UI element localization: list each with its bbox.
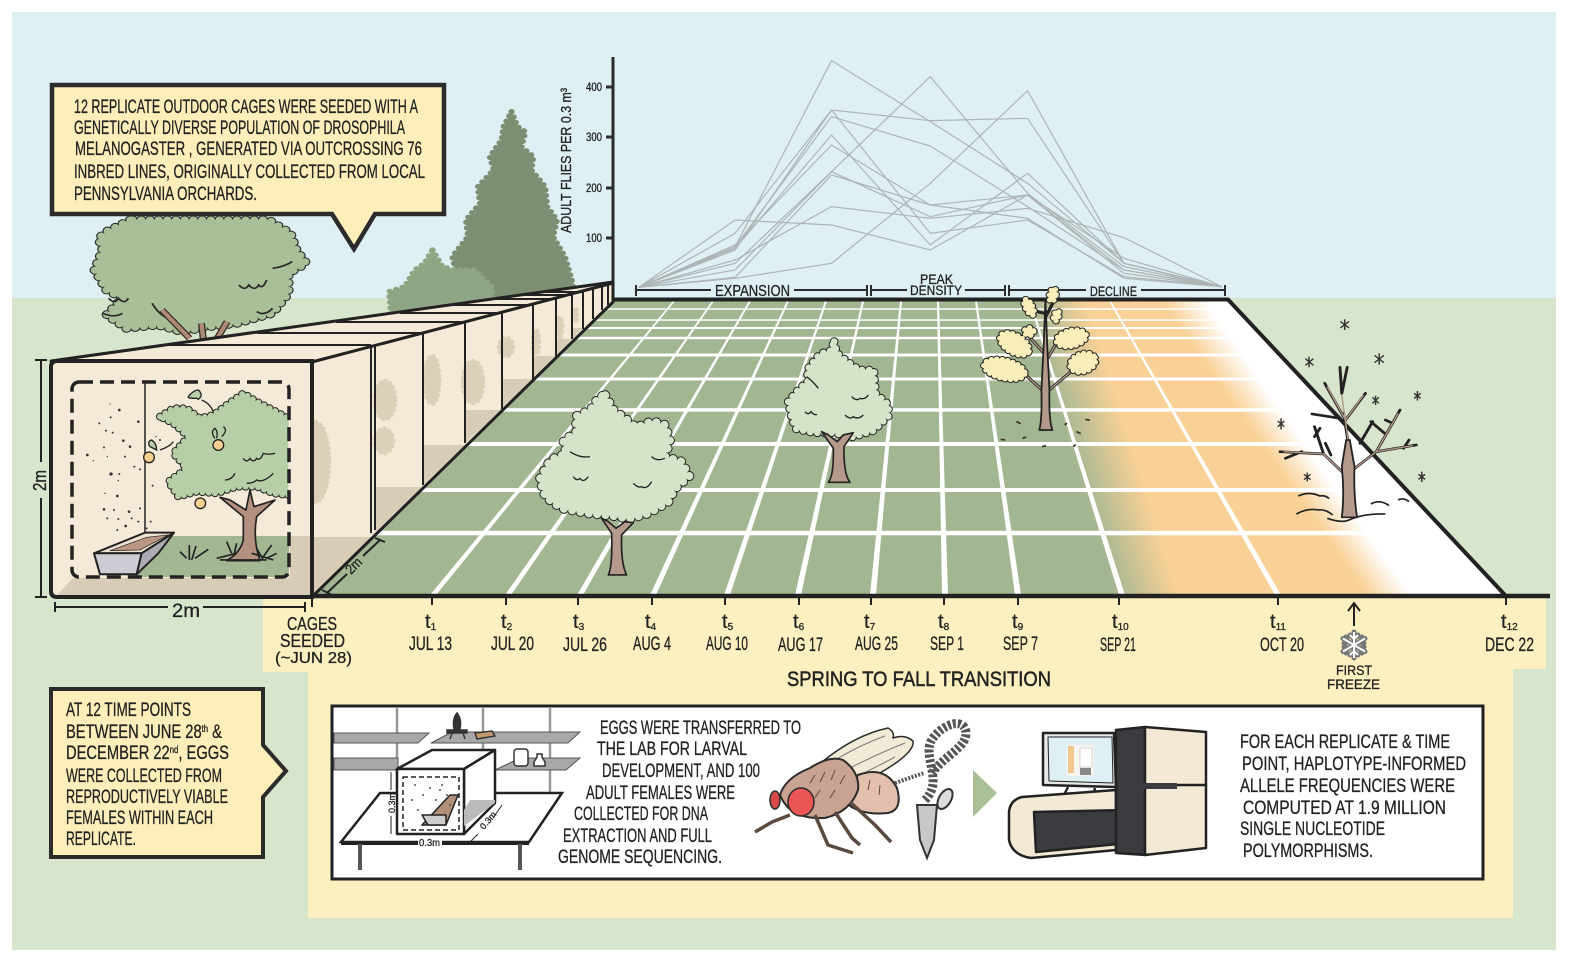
timeline labels: sampling dates: OCT 20 [1260, 635, 1304, 656]
arrow: green [973, 770, 997, 817]
callout text: DECEMBER 22 [66, 743, 200, 764]
y axis tick labels [586, 80, 602, 245]
legs [755, 802, 891, 853]
timeline labels: sampling dates: AUG 4 [633, 634, 671, 655]
icon: sample tube [917, 786, 956, 858]
tree shadows on side wall [301, 308, 577, 502]
winter branches outline [1280, 367, 1416, 473]
canopy detail [805, 377, 868, 418]
illustration: sequencer [1009, 727, 1206, 858]
callout text: GENETICALLY DIVERSE POPULATION OF DROSOPHILA [74, 118, 405, 139]
spring tree [540, 395, 689, 575]
timeline labels: sampling dates: t [722, 611, 728, 633]
canopy detail [103, 262, 292, 320]
callout text [74, 97, 425, 205]
winter trunk [1342, 440, 1357, 517]
timeline labels: sampling dates: 9 [1018, 622, 1024, 633]
phase bracket: expansion: EXPANSION [715, 283, 790, 300]
timeline yellow band [263, 596, 1546, 918]
timeline labels: sampling dates: t [501, 611, 507, 633]
small cage dimensions: 0.3m [387, 793, 397, 813]
front face panel [51, 361, 312, 597]
phase bracket: peak density: PEAK [920, 271, 954, 287]
table [341, 793, 562, 870]
timeline labels: sampling dates: t [938, 611, 944, 633]
dimension: cage width 2m [55, 601, 305, 622]
dimension: cage width 2m: 2m [172, 601, 200, 622]
timeline labels: sampling dates: SEP 7 [1003, 634, 1038, 655]
timeline labels: sampling dates: 7 [870, 622, 876, 633]
timeline labels: sampling dates [409, 611, 1534, 656]
chart series [639, 61, 1222, 287]
trunk [220, 490, 275, 561]
timeline labels: sampling dates: t [1270, 611, 1276, 633]
food trough [94, 533, 174, 574]
callout box with pointer [51, 689, 286, 857]
timeline label: cages seeded: SEEDED [280, 631, 345, 651]
timeline labels: sampling dates: SEP 1 [930, 634, 964, 655]
timeline labels: sampling dates: t [864, 611, 870, 633]
snowflakes falling [1278, 319, 1425, 482]
callout text [66, 700, 229, 850]
text: eggs transferred: DEVELOPMENT, AND 100 [602, 761, 760, 782]
y axis tick labels: 200 [586, 181, 602, 195]
dimension: cage depth 2m: 2m [342, 554, 365, 577]
trunk [822, 432, 853, 482]
canopy fill [95, 220, 306, 332]
cage row [51, 282, 613, 597]
text: allele frequencies: ALLELE FREQUENCIES WERE [1240, 776, 1455, 797]
callout text: REPRODUCTIVELY VIABLE [66, 787, 228, 808]
back corner line [144, 382, 146, 536]
flies dots [86, 403, 161, 531]
fallen leaves [1001, 419, 1090, 447]
small cage [397, 750, 495, 834]
oranges [213, 440, 224, 450]
phase bracket: decline [1009, 283, 1225, 299]
timeline labels: sampling dates: AUG 17 [778, 635, 823, 656]
timeline labels: sampling dates: SEP 21 [1100, 635, 1136, 656]
timeline label: cages seeded: CAGES [287, 614, 337, 634]
text: allele frequencies: POLYMORPHISMS. [1243, 841, 1373, 862]
phase bracket: peak density: DENSITY [910, 282, 963, 298]
floor shadows in side cages [312, 328, 583, 597]
front cage face [51, 361, 312, 597]
autumn branches [1024, 303, 1076, 390]
timeline labels: sampling dates: 1 [431, 622, 437, 633]
handle [1143, 783, 1177, 789]
leaf sprigs [149, 390, 225, 450]
microscope [447, 713, 467, 739]
timeline labels: sampling dates: t [1501, 611, 1507, 633]
text: allele frequencies: POINT, HAPLOTYPE-INFORMED [1242, 754, 1466, 775]
y axis tick labels: 400 [586, 80, 602, 94]
instrument drawer [1034, 810, 1128, 852]
text: eggs transferred: THE LAB FOR LARVAL [597, 739, 747, 760]
callout text: AT 12 TIME POINTS [66, 700, 191, 721]
timeline labels: sampling dates: 8 [944, 622, 950, 633]
dimension: cage height 2m: 2m [30, 470, 50, 491]
canopy detail [225, 453, 275, 483]
callout text: MELANOGASTER , GENERATED VIA OUTCROSSING 76 [75, 139, 422, 160]
background trees [95, 112, 573, 340]
side wall outline [312, 283, 613, 597]
icon: snowflake [1343, 632, 1365, 658]
text: allele frequencies: COMPUTED AT 1.9 MILLION [1243, 798, 1446, 819]
text: allele frequencies: SINGLE NUCLEOTIDE [1240, 819, 1385, 840]
conifer large [452, 112, 573, 307]
callout text: 12 REPLICATE OUTDOOR CAGES WERE SEEDED WITH A [74, 97, 418, 118]
canopy [160, 393, 300, 497]
timeline labels: sampling dates: t [1012, 611, 1018, 633]
text: allele frequencies [1240, 732, 1466, 862]
callout: time points [51, 689, 286, 857]
panel: lab and sequencing [332, 706, 1483, 879]
abdomen [845, 772, 899, 814]
cage dividers [165, 285, 608, 533]
field base [312, 300, 1505, 595]
grass tufts [180, 542, 277, 560]
arrow: first freeze [1348, 603, 1360, 626]
callout text: BETWEEN JUNE 28 [66, 722, 241, 743]
trunk branches [162, 310, 227, 340]
text: eggs transferred: GENOME SEQUENCING. [558, 847, 722, 868]
orange tree in cage [94, 390, 300, 574]
text: eggs transferred: EGGS WERE TRANSFERRED TO [600, 718, 801, 739]
timeline labels: sampling dates: 5 [728, 622, 734, 633]
timeline axis [312, 590, 1550, 607]
panel background [332, 706, 1483, 879]
instrument base [1009, 790, 1116, 858]
dashed inner cage outline [72, 382, 289, 577]
timeline labels: sampling dates: JUL 26 [563, 635, 607, 656]
dimension: cage height 2m [30, 360, 50, 597]
deciduous tree behind callout [95, 220, 306, 340]
small cage dimensions: 0.3m [478, 810, 498, 831]
icon: dna helix [895, 724, 966, 800]
phase bracket: peak density [871, 271, 1005, 298]
front face outline [51, 361, 312, 597]
callout text: , EGGS [178, 743, 229, 764]
cage tops [51, 282, 613, 362]
timeline label: cages seeded: (~JUN 28) [275, 650, 352, 667]
autumn leaves outline [981, 288, 1099, 383]
timeline labels: sampling dates: 12 [1507, 622, 1518, 633]
timeline labels: sampling dates: t [645, 611, 651, 633]
wing veins [835, 736, 905, 775]
winter branches fill [1284, 387, 1413, 473]
cage side wall [312, 283, 613, 597]
line chart: adult flies per 0.3 m3 [558, 57, 1225, 300]
monitor [1043, 733, 1116, 787]
jar and bottle [514, 749, 545, 766]
text: eggs transferred: ADULT FEMALES WERE [586, 783, 735, 804]
canopy [788, 342, 888, 437]
callout text: REPLICATE. [66, 829, 136, 850]
timeline labels: sampling dates: t [793, 611, 799, 633]
phase bracket: decline: DECLINE [1090, 283, 1137, 299]
timeline labels: sampling dates: JUL 20 [491, 634, 534, 655]
ground grid field [300, 295, 1570, 600]
field outline right edge [610, 300, 1505, 595]
callout text: INBRED LINES, ORIGINALLY COLLECTED FROM LOCAL [74, 162, 425, 183]
timeline labels: sampling dates: AUG 10 [706, 634, 748, 655]
first freeze label: FIRST [1336, 662, 1372, 678]
callout text: nd [170, 745, 178, 756]
distant grass background [12, 298, 1556, 950]
callout box with pointer [52, 85, 444, 249]
timeline labels: sampling dates: t [573, 611, 579, 633]
y axis [606, 57, 613, 284]
illustration: lab bench [334, 707, 580, 870]
monitor stand [1065, 787, 1095, 793]
callout text: PENNSYLVANIA ORCHARDS. [74, 184, 257, 205]
timeline labels: sampling dates: t [1112, 611, 1118, 633]
callout: cages seeded [52, 85, 444, 249]
timeline labels: sampling dates: 10 [1118, 622, 1129, 633]
timeline labels: sampling dates: DEC 22 [1485, 635, 1534, 656]
small cage dimensions: 0.3m [419, 838, 440, 849]
phase bracket: expansion [636, 283, 867, 300]
box on shelf [475, 731, 495, 739]
eye [788, 788, 814, 816]
illustration: fruit fly [755, 728, 913, 853]
timeline labels: sampling dates: 3 [579, 622, 585, 633]
text: eggs transferred: EXTRACTION AND FULL [563, 826, 712, 847]
timeline title: SPRING TO FALL TRANSITION [787, 668, 1051, 691]
leaf stems [160, 400, 213, 450]
shelf posts [397, 707, 550, 795]
tower cream [1145, 727, 1206, 855]
y axis title: ADULT FLIES PER 0.3 m³ [558, 88, 575, 233]
canopy detail [570, 452, 665, 488]
timeline labels: sampling dates: 11 [1276, 622, 1286, 633]
text: eggs transferred: COLLECTED FOR DNA [574, 804, 708, 825]
shelves [334, 732, 580, 770]
text: allele frequencies: FOR EACH REPLICATE & TIME [1240, 732, 1450, 753]
tower dark [1116, 727, 1145, 855]
small cage dimensions [387, 772, 502, 849]
callout text: FEMALES WITHIN EACH [66, 808, 213, 829]
autumn leaves fill [981, 288, 1099, 383]
winter tree [1278, 319, 1425, 521]
autumn trunk [1039, 300, 1052, 430]
autumn gradient [1034, 302, 1406, 594]
thorax [780, 759, 858, 818]
small cage flies [411, 784, 451, 811]
canopy beads [95, 220, 306, 332]
text: eggs transferred [558, 718, 801, 868]
dimension: cage depth 2m [322, 538, 385, 595]
timeline label: cages seeded [275, 614, 352, 667]
monitor content [1067, 745, 1094, 776]
first freeze label: FREEZE [1327, 676, 1380, 692]
trunk [602, 518, 633, 575]
callout text: th [202, 724, 208, 735]
y axis tick labels: 300 [586, 130, 602, 144]
timeline labels: sampling dates: JUL 13 [409, 634, 452, 655]
timeline labels: sampling dates: 6 [799, 622, 805, 633]
sky background [12, 12, 1556, 299]
callout text: WERE COLLECTED FROM [66, 766, 222, 787]
callout text: & [208, 722, 222, 743]
first freeze label [1327, 662, 1380, 692]
canopy [540, 395, 689, 519]
summer tree [788, 342, 888, 482]
grid lines [375, 301, 1455, 595]
cage floor grass [130, 536, 289, 577]
front floor shadow [55, 536, 312, 597]
winter gradient [1165, 302, 1502, 594]
body hairs [810, 770, 880, 798]
timeline labels: sampling dates: t [425, 611, 431, 633]
timeline labels: sampling dates: AUG 25 [855, 634, 898, 655]
y axis tick labels: 100 [586, 231, 602, 245]
conifer small [389, 250, 494, 313]
snow mounds [1296, 493, 1409, 521]
timeline labels: sampling dates: 4 [651, 622, 657, 633]
autumn tree [981, 288, 1099, 447]
wings [822, 728, 913, 790]
timeline labels: sampling dates: 2 [507, 622, 513, 633]
